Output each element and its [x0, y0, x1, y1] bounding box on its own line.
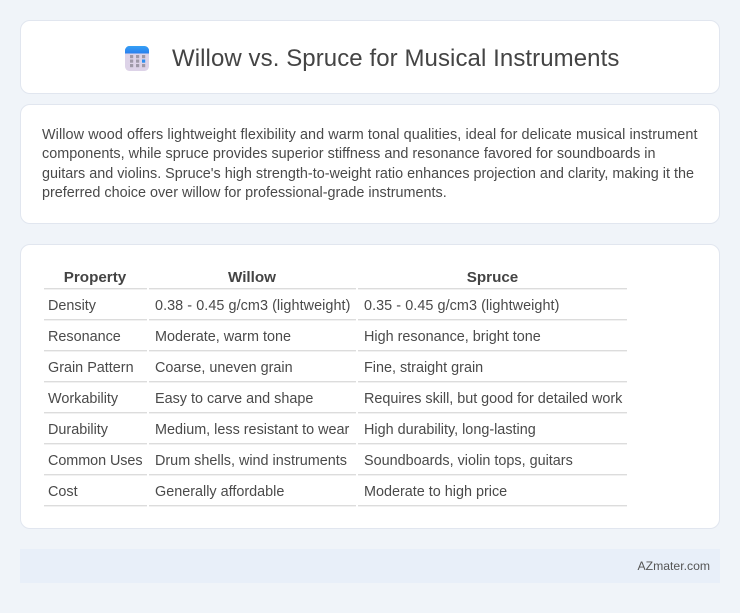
row: Density: Density [48, 298, 96, 314]
footer credit: AZmater.com [638, 559, 710, 573]
row: Cost [48, 484, 507, 500]
row: Density: 0.38 - 0.45 g/cm3 (lightweight) [155, 298, 350, 314]
icon: calendar [125, 46, 149, 71]
title: Willow vs. Spruce for Musical Instruments [172, 45, 619, 72]
row: Durability [48, 422, 536, 438]
row: Grain Pattern: Fine, straight grain [364, 360, 483, 376]
row: Cost: Cost [48, 484, 78, 500]
panel: introduction [20, 104, 720, 224]
text: introduction paragraph: guitars and violins. Spruce's high strength-to-weight ratio enhances projection and clarity, making it the [42, 166, 694, 182]
row: Grain Pattern [48, 360, 483, 376]
row: Workability: Requires skill, but good for detailed work [364, 391, 622, 407]
row: Cost: Moderate to high price [364, 484, 507, 500]
footer bar [20, 549, 720, 583]
row: Workability: Workability [48, 391, 118, 407]
row: Workability [48, 391, 622, 407]
row: Common Uses: Common Uses [48, 453, 143, 469]
row: Resonance: Resonance [48, 329, 121, 345]
text: introduction paragraph: components, while spruce provides superior stiffness and resonance favored for soundboards in [42, 146, 656, 162]
row: Grain Pattern: Grain Pattern [48, 360, 134, 376]
row: Common Uses: Soundboards, violin tops, guitars [364, 453, 573, 469]
row: Density [48, 298, 559, 314]
row: Resonance [48, 329, 541, 345]
row: Durability: Medium, less resistant to wear [155, 422, 349, 438]
text: introduction paragraph: Willow wood offers lightweight flexibility and warm tonal qualities, ideal for delicate musical instrument [42, 127, 698, 143]
panel: title header [20, 20, 720, 94]
row: Durability: Durability [48, 422, 108, 438]
row: Common Uses: Drum shells, wind instruments [155, 453, 347, 469]
row: Workability: Easy to carve and shape [155, 391, 313, 407]
text: introduction paragraph [42, 127, 698, 201]
text: introduction paragraph: preferred choice over willow for professional-grade instruments. [42, 185, 447, 201]
panel: comparison table [20, 244, 720, 529]
row: Resonance: High resonance, bright tone [364, 329, 541, 345]
table header: Property: Property [64, 269, 126, 286]
row: Density: 0.35 - 0.45 g/cm3 (lightweight) [364, 298, 559, 314]
table header: Spruce: Spruce [467, 269, 518, 286]
row: Durability: High durability, long-lasting [364, 422, 536, 438]
row: Grain Pattern: Coarse, uneven grain [155, 360, 293, 376]
row: Common Uses [48, 453, 573, 469]
row: Cost: Generally affordable [155, 484, 284, 500]
table header: Willow: Willow [228, 269, 276, 286]
row: Resonance: Moderate, warm tone [155, 329, 291, 345]
